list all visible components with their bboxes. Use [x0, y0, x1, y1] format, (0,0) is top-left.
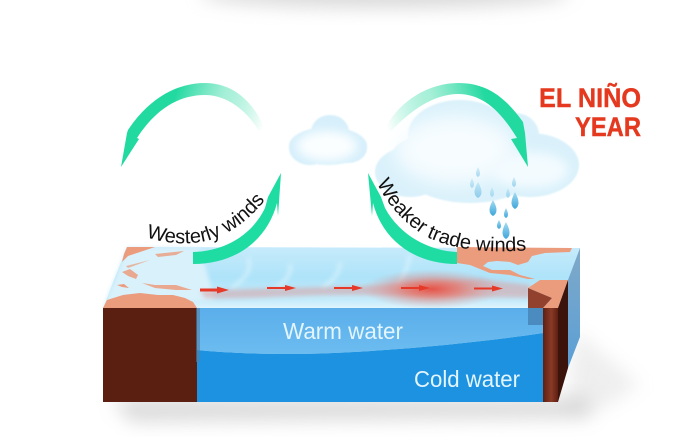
ground shadow — [112, 398, 590, 422]
title — [539, 83, 641, 142]
small cloud — [289, 115, 367, 165]
ocean block — [103, 247, 580, 402]
land: Australia and Asia — [103, 247, 197, 308]
title: EL NIÑO — [539, 83, 641, 113]
arrow: upper right circulation — [386, 83, 528, 167]
cold water layer — [197, 333, 543, 402]
label: cold water: Cold water — [414, 366, 520, 392]
label: weaker trade winds: Weaker trade winds — [378, 176, 526, 252]
big rain cloud — [375, 100, 579, 203]
label: warm water: Warm water — [283, 318, 403, 344]
red current arrows — [200, 285, 503, 294]
warm water band — [200, 279, 530, 298]
left continental wall — [103, 308, 197, 402]
submerged coast — [528, 288, 552, 308]
title: YEAR — [575, 112, 641, 142]
sea surface — [103, 247, 580, 308]
right continental wall — [543, 308, 558, 402]
top shadow — [200, 0, 570, 8]
land: Americas — [457, 247, 572, 308]
label: westerly winds: Westerly winds — [149, 195, 264, 244]
rain drops — [470, 167, 518, 239]
warm pool — [362, 269, 502, 309]
warm water layer — [197, 308, 543, 354]
current ripples — [232, 255, 410, 288]
arrow: weaker trade winds — [368, 173, 457, 264]
arrow: upper left circulation — [121, 83, 264, 167]
arrow: westerly winds — [193, 173, 281, 264]
pale shelf seas — [103, 247, 215, 308]
